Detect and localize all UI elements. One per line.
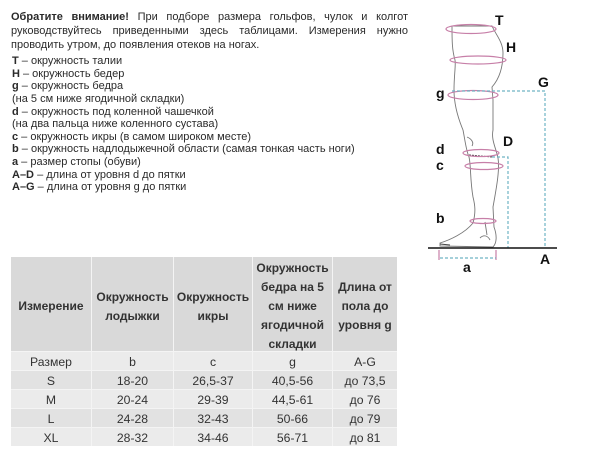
size table: 44,5-61 (272, 392, 313, 406)
size table: икры (198, 308, 228, 322)
row: M (11, 390, 397, 408)
row: symbols (11, 352, 397, 370)
size table: до 79 (350, 412, 380, 426)
diagram letters: T (495, 12, 504, 28)
measurement legend: A–G – длина от уровня g до пятки (12, 181, 186, 193)
size table: 26,5-37 (192, 374, 234, 388)
size table: уровня g (338, 318, 392, 332)
size table: 34-46 (197, 430, 229, 444)
diagram letters: a (463, 259, 471, 275)
size table: 29-39 (197, 392, 229, 406)
size table: Измерение (18, 299, 84, 313)
diagram letters: D (503, 133, 513, 149)
measurement legend: A–D – длина от уровня d до пятки (12, 169, 186, 181)
size table: ягодичной (261, 318, 324, 332)
size table: 24-28 (117, 412, 148, 426)
size table: см ниже (268, 299, 317, 313)
size table: Длина от (338, 280, 392, 294)
row: XL (11, 428, 397, 446)
row: S (11, 371, 397, 389)
diagram letters: A (540, 251, 550, 267)
diagram letters: G (538, 74, 549, 90)
leg outline (440, 26, 503, 247)
measurement legend: a – размер стопы (обуви) (12, 156, 141, 168)
size table: b (129, 354, 136, 368)
size table: Размер (30, 354, 72, 368)
size table: Окружность (177, 290, 249, 304)
size table: до 81 (350, 430, 380, 444)
measurement legend: d – окружность под коленной чашечкой (12, 106, 214, 118)
size table: 18-20 (117, 374, 148, 388)
size table: до 73,5 (344, 374, 386, 388)
measurement legend: (на 5 см ниже ягодичной складки) (12, 93, 184, 105)
diagram letters: b (436, 210, 445, 226)
circumference rings (439, 24, 506, 260)
measurement legend: (на два пальца ниже коленного сустава) (12, 118, 218, 130)
diagram letters: H (506, 39, 516, 55)
size table: 32-43 (197, 412, 229, 426)
ground line (428, 247, 557, 249)
size table: 56-71 (277, 430, 308, 444)
size table: пола до (342, 299, 388, 313)
leg measurement diagram (428, 12, 557, 275)
measurement legend: T – окружность талии (12, 55, 122, 67)
measurement legend: c – окружность икры (в самом широком месте) (12, 131, 251, 143)
diagram letters: c (436, 157, 444, 173)
size table (11, 257, 397, 446)
diagram letters (436, 12, 550, 275)
size table: 20-24 (117, 392, 148, 406)
measurement legend: g – окружность бедра (12, 80, 123, 92)
size table: S (47, 374, 55, 388)
size table: A-G (354, 354, 376, 368)
size table: лодыжки (105, 308, 160, 322)
measurement legend: b – окружность надлодыжечной области (самая тонкая часть ноги) (12, 143, 355, 155)
intro text: Обратите внимание! При подборе размера гольфов, чулок и колгот руководствуйтесь приведенными здесь таблицами. Измерения нужно проводить утром, до появления отеков на ногах. (11, 10, 408, 51)
measurement legend: H – окружность бедер (12, 68, 124, 80)
dotted length guides (440, 91, 545, 258)
size table: M (46, 392, 56, 406)
size table: бедра на 5 (261, 280, 324, 294)
size table: L (48, 412, 54, 426)
size table: XL (44, 430, 58, 444)
size table: Окружность (96, 290, 169, 304)
size table: 40,5-56 (272, 374, 313, 388)
size table: c (210, 354, 216, 368)
size table: складки (268, 337, 317, 351)
diagram letters: d (436, 141, 445, 157)
row: L (11, 409, 397, 427)
measurement legend (12, 55, 355, 193)
size table: до 76 (350, 392, 380, 406)
size table: Окружность (256, 261, 329, 275)
size table: g (289, 354, 296, 368)
size table: 50-66 (277, 412, 308, 426)
toes and knee mark (440, 155, 492, 245)
diagram letters: g (436, 85, 445, 101)
table header (11, 257, 397, 351)
size table: 28-32 (117, 430, 148, 444)
